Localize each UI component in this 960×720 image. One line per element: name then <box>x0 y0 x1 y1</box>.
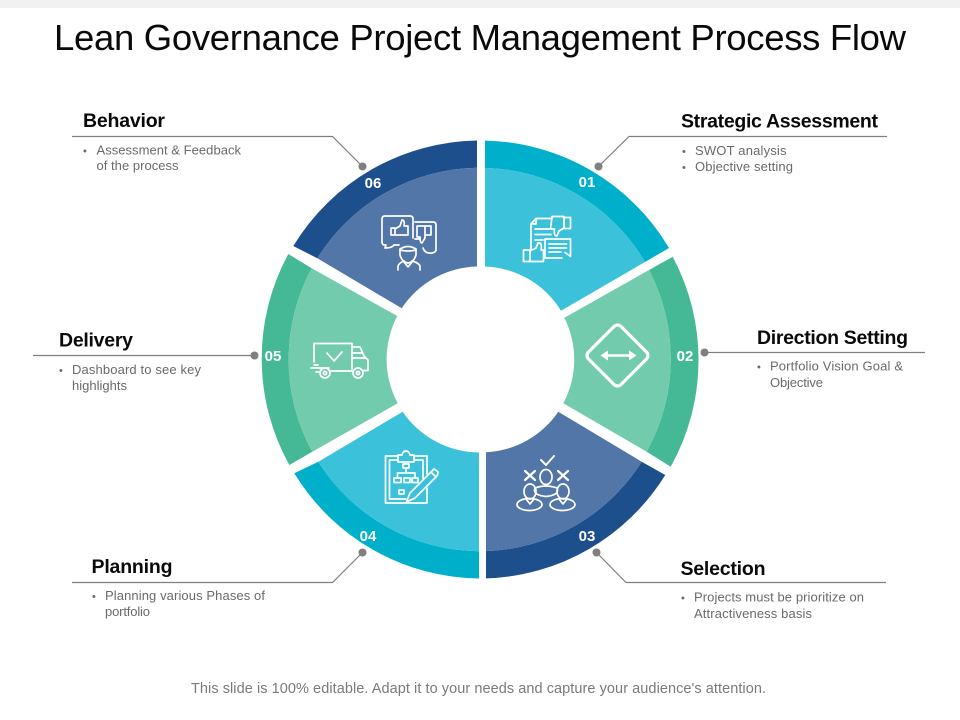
panel: segment 03 <box>486 412 665 578</box>
text block: • <box>681 592 685 604</box>
number 05: 05 <box>265 348 281 365</box>
outer band 05 <box>262 254 312 465</box>
icon: delivery truck with check mark <box>311 344 368 378</box>
icon: team selection <box>517 456 575 510</box>
outer band 02 <box>647 257 699 467</box>
panel: segment 05 <box>262 254 398 465</box>
text block: Assessment & Feedback <box>96 142 242 158</box>
connector with dot <box>594 136 887 170</box>
inner wedge 05 <box>289 268 398 452</box>
icon: clipboard with flowchart and pencil <box>386 451 438 503</box>
heading: Strategic Assessment <box>681 110 878 132</box>
inner wedge 04 <box>318 412 479 551</box>
callout: delivery <box>33 330 258 393</box>
connector with dot <box>72 548 366 582</box>
text block: • <box>682 146 686 158</box>
inner wedge 01 <box>485 168 645 311</box>
outer band 04 <box>294 462 479 578</box>
text block: Attractiveness basis <box>694 606 812 621</box>
connector with dot <box>72 136 366 170</box>
panel: segment 06 <box>293 140 477 308</box>
icon: diamond road sign with double arrow <box>585 323 650 388</box>
heading: Planning <box>92 556 172 578</box>
outer band 01 <box>485 141 669 262</box>
heading: Delivery <box>59 330 133 352</box>
text block: • <box>757 362 761 374</box>
icon: documents and thumbs feedback <box>524 216 570 262</box>
number 06: 06 <box>365 175 381 192</box>
icon: person with like and dislike bubbles <box>382 216 436 270</box>
heading: Behavior <box>83 110 165 132</box>
text block: portfolio <box>105 604 150 619</box>
text block: • <box>92 591 96 603</box>
text block: Dashboard to see key <box>72 362 202 377</box>
connector with dot <box>33 352 258 360</box>
callout: selection <box>592 548 886 621</box>
text block: Projects must be prioritize on <box>694 590 864 604</box>
inner wedge 03 <box>486 412 642 551</box>
number 03: 03 <box>579 528 595 545</box>
number 02: 02 <box>677 348 693 365</box>
text block: Portfolio Vision Goal & <box>770 358 903 374</box>
text block: Planning various Phases of <box>105 588 265 603</box>
inner wedge 06 <box>317 168 477 308</box>
text block: • <box>83 146 87 158</box>
text block: Objective setting <box>695 159 793 174</box>
callout: strategic assessment <box>594 110 887 174</box>
footer note: This slide is 100% editable. Adapt it to your needs and capture your audience's attention. <box>191 681 766 697</box>
text block: • <box>682 162 686 174</box>
number 01: 01 <box>579 174 595 191</box>
outer band 03 <box>486 462 665 578</box>
text block: SWOT analysis <box>695 143 787 158</box>
panel: segment 02 <box>563 257 699 467</box>
panel: segment 04 <box>294 412 479 578</box>
outer band 06 <box>293 140 477 258</box>
heading: Direction Setting <box>757 327 908 349</box>
title: Lean Governance Project Management Process Flow <box>54 17 907 58</box>
connector with dot <box>700 348 925 356</box>
text block: Objective <box>770 375 823 390</box>
text block: highlights <box>72 378 128 393</box>
number 04: 04 <box>360 528 377 545</box>
callout: direction setting <box>700 327 925 390</box>
inner wedge 02 <box>563 270 671 452</box>
text block: • <box>59 365 63 377</box>
panel: segment 01 <box>485 141 669 311</box>
connector with dot <box>592 548 886 582</box>
callout: planning <box>72 548 366 619</box>
heading: Selection <box>680 558 766 580</box>
callout: behavior <box>72 110 366 173</box>
text block: of the process <box>96 158 179 173</box>
